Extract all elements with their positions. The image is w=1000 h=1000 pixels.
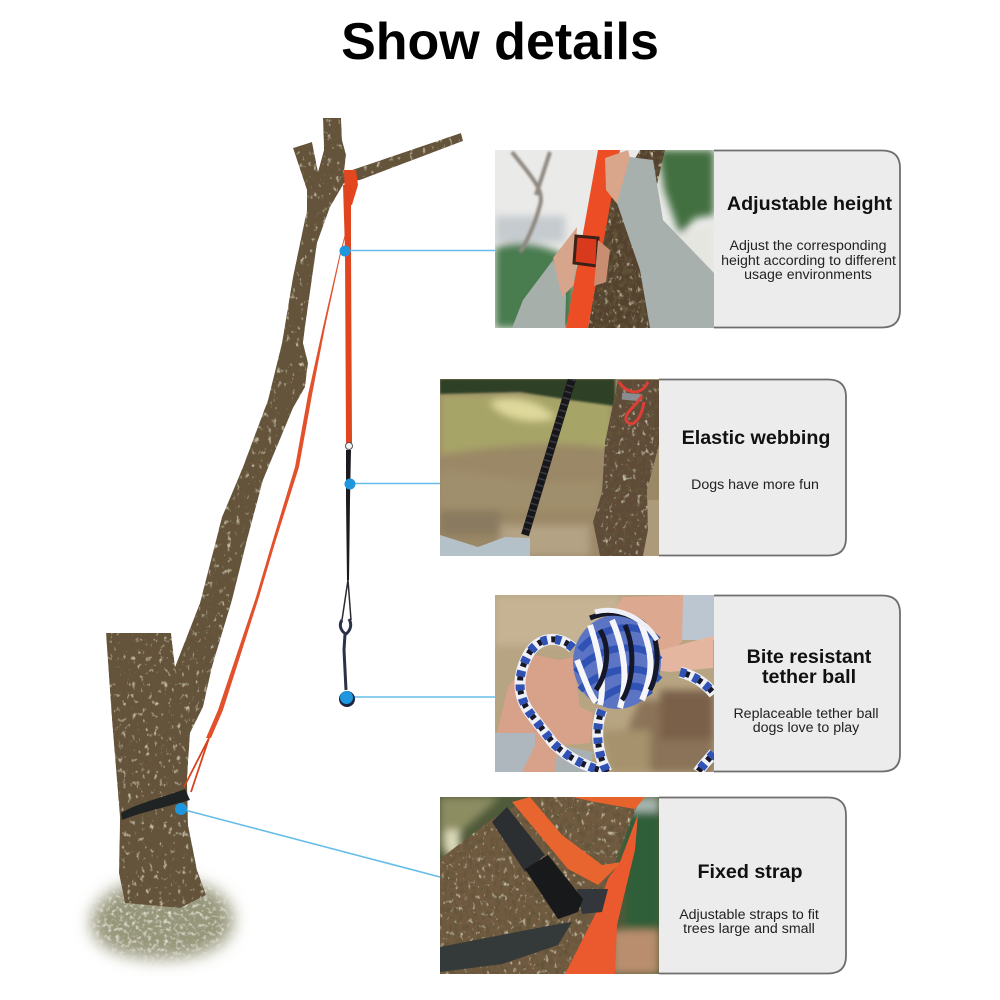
photo: hands on strap (495, 150, 714, 328)
description: Adjust the corresponding (730, 238, 886, 254)
black tree strap (121, 789, 190, 820)
black elastic cord (346, 450, 351, 580)
line: elastic webbing (344, 478, 440, 490)
photo: elastic in park (440, 379, 659, 556)
description: Replaceable tether ball (733, 706, 879, 722)
lower strap split (184, 738, 209, 792)
description: usage environments (744, 267, 872, 283)
title: Show details (341, 13, 659, 71)
photo: buckle on tree (440, 797, 659, 974)
rope loops (520, 639, 714, 772)
carabiner and rope (340, 619, 351, 690)
card background (659, 798, 846, 974)
line: tether ball (339, 691, 495, 707)
heading: tether ball (762, 666, 856, 688)
description: height according to different (721, 253, 896, 269)
ground grass patch (91, 880, 233, 959)
long diagonal strap (206, 215, 351, 738)
panel: bite resistant tether ball (495, 595, 900, 772)
metal ring (346, 442, 352, 450)
split cord (342, 580, 351, 620)
callout lines and dots (175, 246, 495, 877)
rope ball (573, 615, 661, 709)
heading: Bite resistant (747, 646, 872, 668)
heading: Fixed strap (697, 861, 803, 883)
line: adjustable height (340, 246, 495, 256)
heading: Adjustable height (727, 193, 893, 215)
tree trunk and branches (106, 118, 463, 908)
description: trees large and small (683, 921, 815, 937)
card background (659, 380, 846, 556)
description: Adjustable straps to fit (679, 907, 819, 923)
panel: adjustable height (495, 150, 900, 328)
description: Dogs have more fun (691, 477, 819, 493)
description: dogs love to play (753, 720, 860, 736)
heading: Elastic webbing (682, 427, 830, 449)
strap knot at branch (344, 170, 358, 205)
long vertical orange strap (343, 185, 352, 443)
card background (714, 150, 900, 328)
illustration: tree with tether (91, 118, 463, 959)
panel: elastic webbing (440, 379, 846, 556)
photo: rope ball in hands (495, 595, 714, 772)
card background (714, 596, 900, 772)
panel: fixed strap (440, 797, 846, 974)
line: fixed strap (175, 803, 440, 877)
